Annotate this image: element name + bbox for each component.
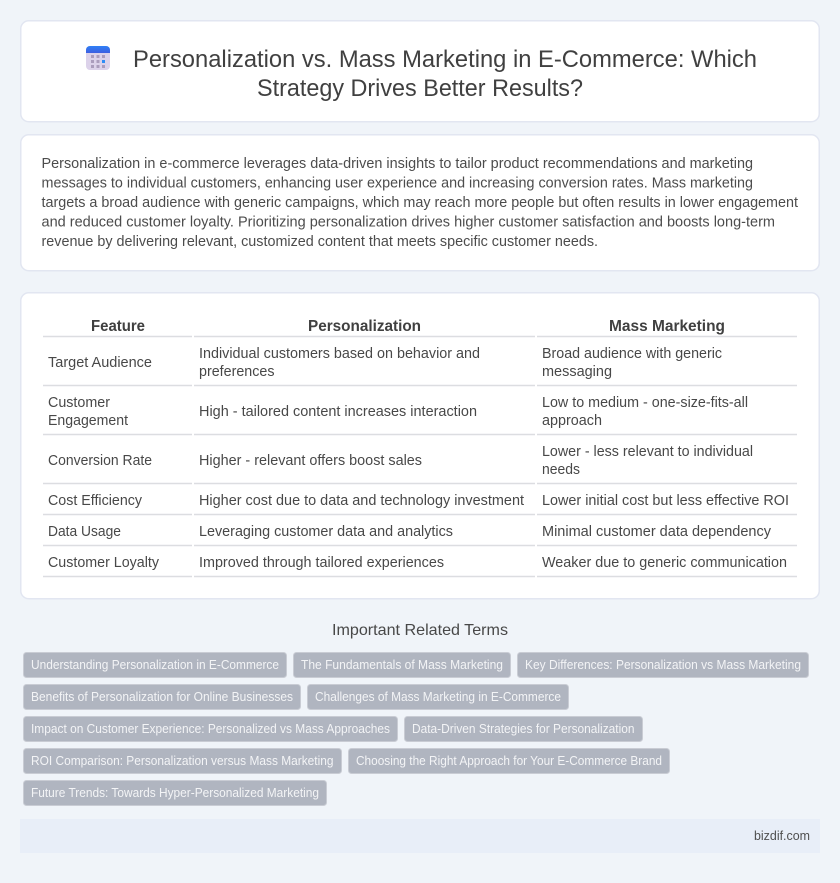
text block: description: Personalization in e-commerce leverages data-driven insights to tailor product recommendations and marketing <box>42 156 753 172</box>
title <box>133 46 757 102</box>
panel: header <box>21 21 819 122</box>
table header: Feature <box>91 318 145 335</box>
row: target audience <box>48 345 722 380</box>
row: customer engagement: High - tailored content increases interaction <box>199 403 477 420</box>
tag <box>24 748 342 774</box>
row: customer loyalty: Weaker due to generic communication <box>542 554 787 571</box>
row: cost efficiency: Higher cost due to data and technology investment <box>199 492 525 509</box>
row: target audience: Target Audience <box>48 354 152 371</box>
tag: Benefits of Personalization for Online Businesses <box>31 690 293 704</box>
table header <box>91 318 725 335</box>
tag <box>24 780 326 806</box>
tag: Future Trends: Towards Hyper-Personalized Marketing <box>31 786 319 800</box>
row: customer loyalty: Improved through tailored experiences <box>199 554 444 571</box>
table header: Mass Marketing <box>609 318 725 335</box>
tag <box>24 716 398 742</box>
tag <box>308 684 568 710</box>
footer: bizdif.com <box>754 829 810 843</box>
text block: description <box>42 156 798 250</box>
row: data usage: Minimal customer data dependency <box>542 523 771 540</box>
row: target audience: Broad audience with generic <box>542 345 722 362</box>
row: customer engagement <box>48 394 748 429</box>
tag <box>24 652 286 678</box>
row: customer engagement: Engagement <box>48 412 129 429</box>
tag: Challenges of Mass Marketing in E-Commerce <box>315 690 561 704</box>
tag: ROI Comparison: Personalization versus Mass Marketing <box>31 754 334 768</box>
footer <box>20 819 820 853</box>
tag <box>24 684 300 710</box>
related terms tags <box>24 652 808 806</box>
row: data usage <box>48 523 771 540</box>
text block: description: and reduced customer loyalty. Prioritizing personalization drives higher customer satisfaction and boosts long-term <box>42 214 775 230</box>
row: cost efficiency: Lower initial cost but less effective ROI <box>542 492 789 509</box>
row: customer engagement: Low to medium - one-size-fits-all <box>542 394 748 411</box>
panel: description <box>21 135 819 271</box>
tag: Key Differences: Personalization vs Mass Marketing <box>525 658 801 672</box>
table header: Personalization <box>308 318 421 335</box>
text block: description: messages to individual customers, enhancing user experience and increasing conversion rates. Mass marketing <box>42 176 753 192</box>
icon: calendar <box>86 46 110 70</box>
row: cost efficiency: Cost Efficiency <box>48 492 142 509</box>
row: conversion rate: Higher - relevant offers boost sales <box>199 452 422 469</box>
tag <box>404 716 642 742</box>
row: data usage: Data Usage <box>48 523 121 540</box>
tag: Data-Driven Strategies for Personalization <box>412 722 635 736</box>
row: target audience: preferences <box>199 363 274 380</box>
row: customer loyalty: Customer Loyalty <box>48 554 159 571</box>
row: data usage: Leveraging customer data and analytics <box>199 523 453 540</box>
tag <box>348 748 670 774</box>
tag: Understanding Personalization in E-Commerce <box>31 658 279 672</box>
text block: description: targets a broad audience with generic campaigns, which may reach more people but often results in lower engagement <box>42 195 798 211</box>
row: target audience: messaging <box>542 363 612 380</box>
row: conversion rate: Lower - less relevant to individual <box>542 443 753 460</box>
row: customer engagement: approach <box>542 412 602 429</box>
heading: important related terms: Important Related Terms <box>332 622 508 639</box>
title: Strategy Drives Better Results? <box>257 75 583 102</box>
title: Personalization vs. Mass Marketing in E-Commerce: Which <box>133 46 757 73</box>
row: customer engagement: Customer <box>48 394 110 411</box>
row: cost efficiency <box>48 492 789 509</box>
row: conversion rate: Conversion Rate <box>48 452 152 469</box>
tag <box>518 652 808 678</box>
tag <box>294 652 510 678</box>
panel: comparison table <box>21 293 819 599</box>
tag: Choosing the Right Approach for Your E-Commerce Brand <box>356 754 662 768</box>
row: customer loyalty <box>48 554 787 571</box>
row: conversion rate: needs <box>542 461 580 478</box>
row: conversion rate <box>48 443 753 478</box>
tag: The Fundamentals of Mass Marketing <box>301 658 503 672</box>
tag: Impact on Customer Experience: Personalized vs Mass Approaches <box>31 722 390 736</box>
row: target audience: Individual customers based on behavior and <box>199 345 480 362</box>
text block: description: revenue by delivering relevant, customized content that meets specific customer needs. <box>42 234 598 250</box>
